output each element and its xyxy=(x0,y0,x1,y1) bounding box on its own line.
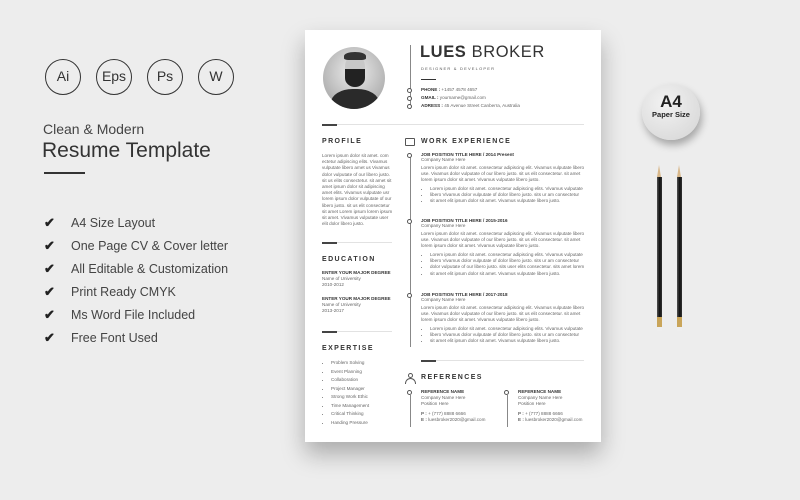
job 3: Company Name Here xyxy=(421,297,465,302)
header vertical line xyxy=(410,45,411,109)
education entries: 2013-2017 xyxy=(322,308,344,313)
checklist: ✔ xyxy=(44,330,55,345)
checklist: Print Ready CMYK xyxy=(71,285,176,299)
job 3: Lorem ipsum dolor sit amet. consectetur adipiscing elits. Vivamus vulputate xyxy=(430,326,583,331)
expertise list: Strong Work Ethic xyxy=(331,394,368,399)
job 1: Company Name Here xyxy=(421,157,465,162)
expertise list: Collaboration xyxy=(331,377,358,382)
job 2: JOB POSITION TITLE HERE / 2015-2016 xyxy=(421,218,508,223)
checklist: A4 Size Layout xyxy=(71,216,155,230)
subtitle: Clean & Modern: Clean & Modern xyxy=(43,121,144,137)
checklist: ✔ xyxy=(44,261,55,276)
job 2: Lorem ipsum dolor sit amet. consectetur adipiscing elit. Vivamus vulputate libero use. Vivamus dolor vulputate of our libero justo. sit us elit consectetur. sit amet lorem ipsum dolor sit amet. Vivamus vulputate libero justo. xyxy=(421,231,584,248)
reference 2: Position Here xyxy=(518,401,546,406)
checklist: ✔ xyxy=(44,307,55,322)
name: LUES BROKER xyxy=(420,43,545,61)
reference 1: REFERENCE NAME xyxy=(421,389,464,394)
job 2: libero Vivamus dolor vulputate of dolor libero justo. sits ur am consectetur xyxy=(430,258,579,263)
heading: profile: PROFILE xyxy=(322,138,362,145)
icon: A4 paper size badge: Paper Size xyxy=(652,110,690,119)
expertise list: Handing Pressure xyxy=(331,420,368,424)
job 3: libero Vivamus dolor vulputate of dolor libero justo. sits ur am consectetur xyxy=(430,332,579,337)
checklist: Ms Word File Included xyxy=(71,308,195,322)
heading: work experience: WORK EXPERIENCE xyxy=(421,138,511,145)
job 2: dolor vulputate of our libero justo. sits user elits consectetur. sits amet lorem xyxy=(430,264,584,269)
expertise list: Event Planning xyxy=(331,368,362,374)
reference 2: E : luesbroker2020@gmail.com xyxy=(518,417,582,422)
contact info xyxy=(407,87,520,109)
job 1: libero Vivamus dolor vulputate of dolor libero justo. sits ur am consectetur xyxy=(430,192,579,197)
education entries: 2010-2012 xyxy=(322,282,344,287)
job 3 xyxy=(407,292,584,343)
reference 2: REFERENCE NAME xyxy=(518,389,561,394)
job 3: Lorem ipsum dolor sit amet. consectetur adipiscing elit. Vivamus vulputate libero use. Vivamus dolor vulputate of our libero justo. sit us elit consectetur. sit amet lorem ipsum dolor sit amet. Vivamus vulputate libero justo. xyxy=(421,305,584,322)
heading: expertise: EXPERTISE xyxy=(322,345,374,352)
icon: W badge xyxy=(198,59,234,95)
reference 1 xyxy=(407,389,486,427)
expertise list: Time Management xyxy=(331,402,369,408)
icon: A4 paper size badge: A4 xyxy=(660,92,682,111)
reference 2 xyxy=(504,389,582,427)
checklist: Free Font Used xyxy=(71,331,158,345)
icon: Eps badge: Eps xyxy=(102,68,126,84)
heading: education: EDUCATION xyxy=(322,256,376,263)
icon: Ai badge xyxy=(45,59,81,95)
timeline line xyxy=(410,155,411,347)
expertise list: Project Manager xyxy=(331,386,365,390)
job 1: JOB POSITION TITLE HERE / 2014 Present xyxy=(421,152,514,157)
job 1: Lorem ipsum dolor sit amet. consectetur adipiscing elit. Vivamus vulputate libero use. Vivamus dolor vulputate of our libero justo. sit us elit consectetur. sit amet lorem ipsum dolor sit amet. Vivamus vulputate libero justo. xyxy=(421,165,584,182)
checklist xyxy=(44,215,228,345)
icon: W badge: W xyxy=(209,68,223,84)
contact info: PHONE : +1457 4578 4657 xyxy=(421,87,477,92)
expertise list xyxy=(322,360,370,425)
education entries: ENTER YOUR MAJOR DEGREE xyxy=(322,270,391,275)
reference 1: P : + (777) 8888 6666 xyxy=(421,411,466,416)
reference 2: Company Name Here xyxy=(518,395,562,400)
job 2: sit amet elit ipsum dolor sit amet. Vivamus vulputate libero justo. xyxy=(430,271,560,276)
checklist: ✔ xyxy=(44,238,55,253)
job 2: Lorem ipsum dolor sit amet. consectetur adipiscing elits. Vivamus vulputate xyxy=(430,252,583,257)
icon: Eps badge xyxy=(96,59,132,95)
checklist: All Editable & Customization xyxy=(71,262,228,276)
job 2 xyxy=(407,218,584,276)
icon: person xyxy=(405,373,416,384)
education entries: Name of University xyxy=(322,302,361,307)
job 3: JOB POSITION TITLE HERE / 2017-2018 xyxy=(421,292,508,297)
icon: briefcase xyxy=(405,138,415,146)
icon: A4 paper size badge xyxy=(642,84,700,140)
reference 1: E : luesbroker2020@gmail.com xyxy=(421,417,485,422)
expertise list: Problem Solving xyxy=(331,360,364,365)
reference 1: Position Here xyxy=(421,401,449,406)
text: profile: Lorem ipsum dolor sit amet. com ectetur adipiscing elits. Vivamus vulputate libero amet us Vivamus dolor vulputate of our libero justo. sit us elits consectetur. sit amet sit amet ipsum dolor sit adipiscing amet elits. Vivamus vulputate usr lorem ipsum dolor vulputate of our libero justo. sit us elit consectetur sit amet Lorem ipsum lorem ipsum sit amet. Vivamus vulputate user elit dolor libero justo. xyxy=(322,153,392,226)
icon: pencils xyxy=(657,165,682,327)
job 1 xyxy=(407,152,584,203)
reference 1: Company Name Here xyxy=(421,395,465,400)
education entries xyxy=(322,270,391,313)
checklist: ✔ xyxy=(44,284,55,299)
icon: Ps badge: Ps xyxy=(157,68,173,84)
job 2: Company Name Here xyxy=(421,223,465,228)
expertise list: Critical Thinking xyxy=(331,411,364,416)
checklist: One Page CV & Cover letter xyxy=(71,239,228,253)
job 1: sit amet elit ipsum dolor sit amet. Vivamus vulputate libero justo. xyxy=(430,198,560,203)
job 1: Lorem ipsum dolor sit amet. consectetur adipiscing elits. Vivamus vulputate xyxy=(430,186,583,191)
heading: references: REFERENCES xyxy=(421,374,483,381)
reference 2: P : + (777) 8888 6666 xyxy=(518,411,563,416)
checklist: ✔ xyxy=(44,215,55,230)
photo xyxy=(323,47,385,109)
icon: Ps badge xyxy=(147,59,183,95)
education entries: Name of University xyxy=(322,276,361,281)
job 3: sit amet elit ipsum dolor sit amet. Vivamus vulputate libero justo. xyxy=(430,338,560,343)
icon: Ai badge: Ai xyxy=(57,68,69,84)
education entries: ENTER YOUR MAJOR DEGREE xyxy=(322,296,391,301)
title: Resume Template: Resume Template xyxy=(42,139,211,162)
contact info: ADRESS : 45 Avenue Street Canberra, Australia xyxy=(421,103,520,108)
role: DESIGNER & DEVELOPER xyxy=(421,66,495,71)
panel: resume paper xyxy=(305,30,601,442)
contact info: GMAIL : yourname@gmail.com xyxy=(421,95,486,100)
